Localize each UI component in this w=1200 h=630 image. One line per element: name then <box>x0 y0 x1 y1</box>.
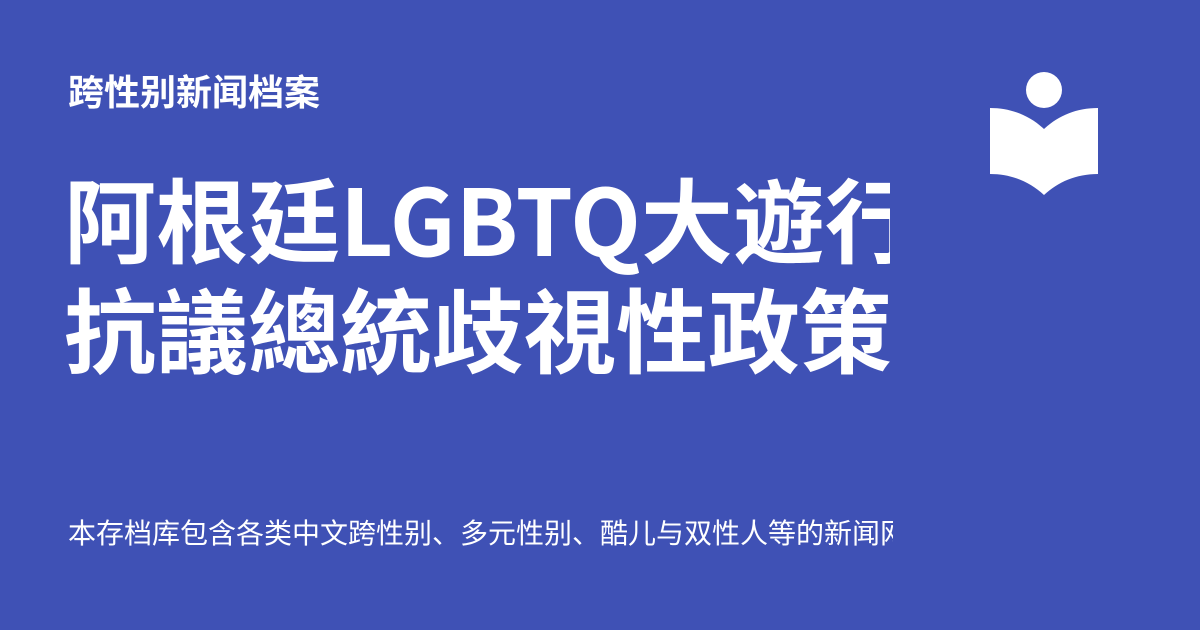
icon: reader with open book <box>990 72 1098 195</box>
title <box>64 162 890 386</box>
